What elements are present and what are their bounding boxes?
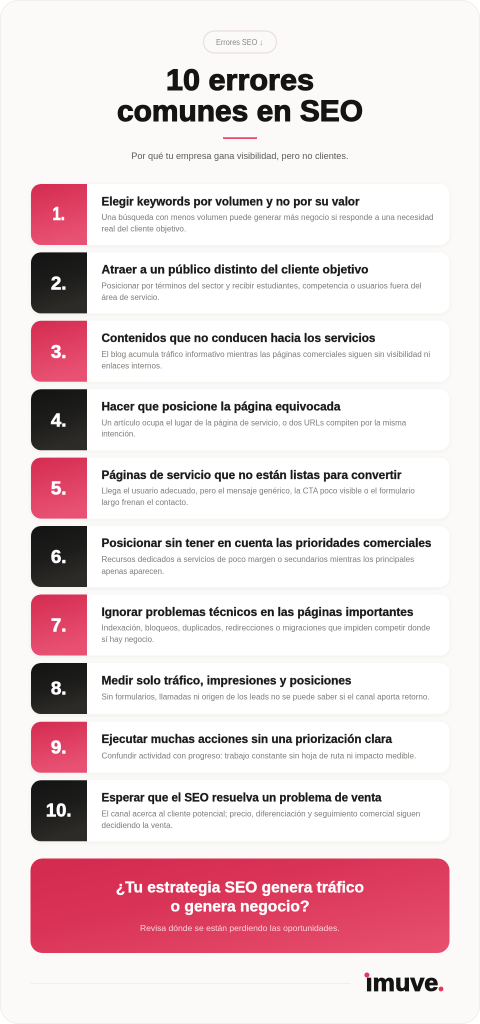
number badge 7: 7. xyxy=(51,614,67,636)
logo: imuve: imuve xyxy=(366,970,438,997)
description 1: Una búsqueda con menos volumen puede generar más negocio si responde a una necesidad xyxy=(102,213,434,222)
heading 1: Elegir keywords por volumen y no por su valor xyxy=(102,194,360,208)
number badge 10: 10. xyxy=(46,800,72,821)
number badge 1: 1. xyxy=(52,203,65,224)
description 2 xyxy=(102,282,422,302)
footer divider xyxy=(30,983,350,984)
description 5: largo frenan el contacto. xyxy=(102,498,188,507)
description 6: apenas aparecen. xyxy=(102,567,164,576)
description 7: Indexación, bloqueos, duplicados, redirecciones o migraciones que impiden competir donde xyxy=(102,624,431,633)
number badge 2 xyxy=(31,252,87,313)
number badge 3: 3. xyxy=(51,341,67,362)
panel: error 9 xyxy=(31,722,450,773)
number badge 5 xyxy=(31,458,87,519)
number badge 2: 2. xyxy=(51,272,67,294)
description 8: Sin formularios, llamadas ni origen de los leads no se puede saber si el canal aporta retorno. xyxy=(102,692,430,701)
description 2: área de servicio. xyxy=(102,293,160,302)
number badge 1 xyxy=(31,184,87,245)
panel: error 7 xyxy=(31,594,450,656)
description 9: Confundir actividad con progreso: trabajo constante sin hoja de ruta ni impacto medible. xyxy=(102,752,416,760)
heading 7: Ignorar problemas técnicos en las páginas importantes xyxy=(102,605,414,619)
description 7 xyxy=(102,624,431,644)
title: comunes en SEO xyxy=(117,95,363,128)
title xyxy=(117,64,363,128)
header tag pill: Errores SEO ↓ xyxy=(216,37,263,47)
description 6: Recursos dedicados a servicios de poco margen o secundarios mientras los principales xyxy=(102,555,414,564)
description 3 xyxy=(102,350,430,370)
heading 6: Posicionar sin tener en cuenta las prioridades comerciales xyxy=(102,536,432,550)
description 7: sí hay negocio. xyxy=(102,635,154,644)
heading 4: Hacer que posicione la página equivocada xyxy=(102,400,341,414)
number badge 8: 8. xyxy=(51,677,67,698)
heading 8: Medir solo tráfico, impresiones y posiciones xyxy=(102,673,352,687)
description 3: enlaces internos. xyxy=(102,362,162,370)
header tag pill xyxy=(204,31,276,53)
description 6 xyxy=(102,555,414,576)
number badge 4 xyxy=(31,389,87,450)
number badge 9: 9. xyxy=(51,736,67,757)
call to action heading: ¿Tu estrategia SEO genera tráfico xyxy=(116,879,364,896)
description 4: intención. xyxy=(102,430,136,439)
call to action text: Revisa dónde se están perdiendo las oportunidades. xyxy=(140,923,340,933)
heading 9: Ejecutar muchas acciones sin una priorización clara xyxy=(102,732,392,746)
description 1: real del cliente objetivo. xyxy=(102,224,186,234)
call to action heading xyxy=(116,879,364,915)
description 10: El canal acerca al cliente potencial; precio, diferenciación y seguimiento comercial siguen xyxy=(102,810,420,819)
number badge 8 xyxy=(31,663,87,714)
description 10 xyxy=(102,810,420,830)
panel: error 3 xyxy=(31,321,450,382)
heading 2: Atraer a un público distinto del cliente objetivo xyxy=(102,262,368,276)
subtitle: Por qué tu empresa gana visibilidad, pero no clientes. xyxy=(131,150,348,161)
number badge 6 xyxy=(31,526,87,587)
title: 10 errores xyxy=(166,64,314,97)
description 1 xyxy=(102,213,434,234)
number badge 10 xyxy=(31,780,87,841)
panel: error 5 xyxy=(31,458,450,519)
call to action heading: o genera negocio? xyxy=(170,898,310,915)
accent rule xyxy=(223,137,257,139)
description 4: Un artículo ocupa el lugar de la página de servicio, o dos URLs compiten por la misma xyxy=(102,418,407,427)
description 10: decidiendo la venta. xyxy=(102,821,173,830)
description 4 xyxy=(102,418,407,439)
heading 5: Páginas de servicio que no están listas para convertir xyxy=(102,468,402,482)
description 5 xyxy=(102,487,415,507)
panel: call to action xyxy=(30,858,450,953)
panel: error 1 xyxy=(31,184,450,245)
number badge 4: 4. xyxy=(51,409,67,430)
number badge 7 xyxy=(31,594,87,656)
description 5: Llega el usuario adecuado, pero el mensaje genérico, la CTA poco visible o el formulario xyxy=(102,487,415,496)
panel: error 4 xyxy=(31,389,450,450)
description 2: Posicionar por términos del sector y recibir estudiantes, competencia o usuarios fuera del xyxy=(102,282,422,291)
number badge 6: 6. xyxy=(51,546,67,567)
panel: error 8 xyxy=(31,663,450,714)
heading 10: Esperar que el SEO resuelva un problema de venta xyxy=(102,790,382,804)
panel: error 6 xyxy=(31,526,450,587)
heading 3: Contenidos que no conducen hacia los servicios xyxy=(102,331,376,345)
panel: error 2 xyxy=(31,252,450,313)
number badge 9 xyxy=(31,722,87,773)
number badge 3 xyxy=(31,321,87,382)
panel: error 10 xyxy=(31,780,450,841)
description 3: El blog acumula tráfico informativo mientras las páginas comerciales siguen sin visibilidad ni xyxy=(102,350,430,359)
number badge 5: 5. xyxy=(51,478,67,498)
